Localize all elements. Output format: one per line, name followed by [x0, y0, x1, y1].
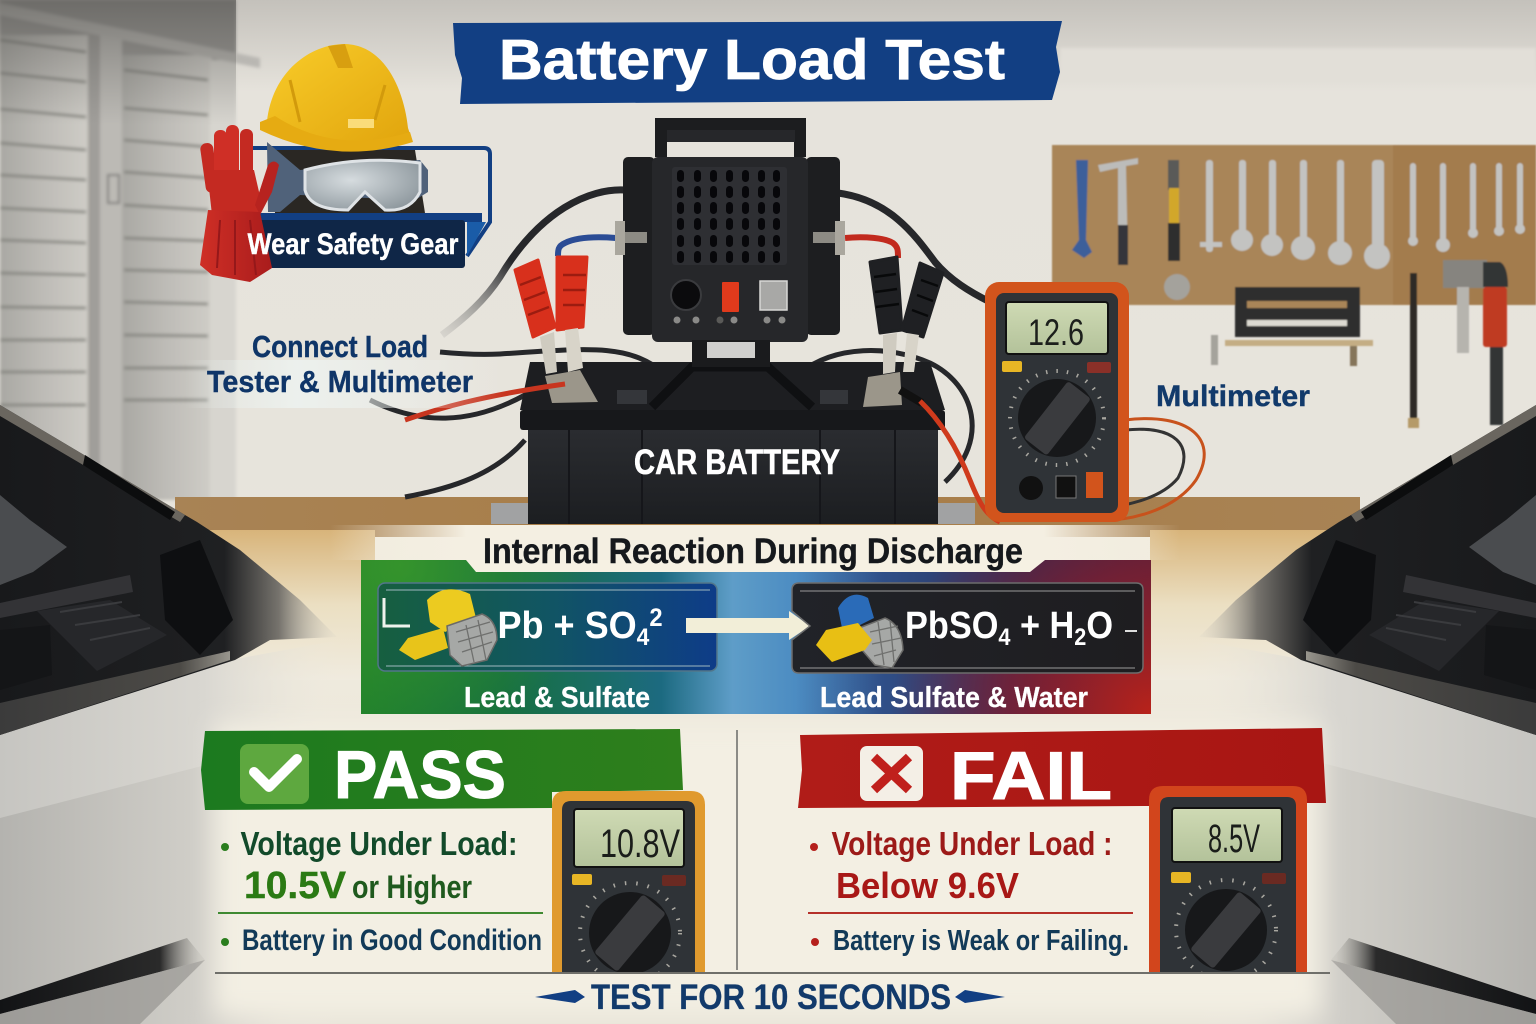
safety gear callout	[200, 44, 490, 282]
icon: hard hat	[260, 44, 413, 152]
baseline rule	[215, 972, 1330, 974]
label: lead sulfate and water: Lead Sulfate & Water	[820, 682, 1088, 714]
fail multimeter	[1149, 786, 1307, 980]
pass criterion: 10.5V	[244, 865, 347, 907]
tester grille	[672, 167, 787, 265]
safety gear label backing	[255, 220, 465, 268]
reaction heading	[330, 525, 1180, 572]
top multimeter	[985, 282, 1129, 522]
fail criterion	[810, 825, 1112, 906]
top multimeter: 12.6	[1028, 312, 1084, 353]
right clamps and leads	[813, 221, 1000, 522]
fail criterion: Voltage Under Load :	[832, 825, 1112, 862]
label: connect load tester and multimeter: Tester & Multimeter	[207, 364, 473, 399]
reaction heading: Internal Reaction During Discharge	[483, 532, 1023, 571]
title banner	[453, 21, 1062, 104]
lower floor background	[0, 530, 1536, 1024]
products box: PbSO	[905, 605, 1008, 647]
icon: lead and sulfate	[399, 589, 497, 666]
reactants box: Pb + SO	[498, 605, 644, 647]
pass criterion: or Higher	[352, 869, 472, 905]
cables behind tester	[370, 190, 1204, 520]
reactants box: 4	[637, 624, 650, 651]
reaction arrow	[686, 611, 810, 640]
fail banner: FAIL	[950, 738, 1112, 814]
icon: cross mark	[860, 746, 923, 801]
load tester	[623, 124, 840, 367]
soft light behind pass and fail panels	[215, 725, 1320, 1015]
title banner: Battery Load Test	[499, 28, 1005, 92]
icon: safety goggles	[267, 142, 428, 212]
divider	[736, 730, 738, 970]
pass multimeter: 10.8V	[600, 822, 680, 866]
pass result: Battery in Good Condition	[242, 924, 542, 957]
fail banner	[798, 728, 1326, 814]
icon: goggles wearer shadow	[270, 150, 425, 213]
products box: + H	[1010, 605, 1074, 647]
pass criterion: Voltage Under Load:	[240, 825, 518, 862]
left car with open hood	[0, 405, 340, 1024]
pass multimeter	[552, 791, 705, 983]
pass banner	[201, 729, 683, 813]
label: connect load tester and multimeter: Connect Load	[252, 329, 428, 364]
reactants box	[378, 583, 717, 671]
label: connect load tester and multimeter	[185, 329, 505, 408]
label: lead and sulfate: Lead & Sulfate	[464, 682, 650, 714]
reactants box: 2	[649, 604, 662, 632]
fail criterion: Below 9.6V	[836, 865, 1019, 906]
panel: internal reaction	[330, 525, 1180, 714]
products box: 2	[1074, 624, 1086, 651]
pass criterion	[221, 825, 518, 907]
pegboard with hanging tools	[1052, 145, 1536, 428]
panel: pass	[201, 729, 705, 983]
panel: fail	[798, 728, 1326, 980]
battery label: CAR BATTERY	[634, 443, 840, 482]
icon: check mark	[240, 744, 309, 804]
fail multimeter: 8.5V	[1208, 817, 1260, 861]
car battery	[491, 362, 975, 524]
label: multimeter: Multimeter	[1156, 380, 1310, 413]
left clamps and leads	[405, 221, 647, 420]
products box: O	[1086, 605, 1113, 647]
tester controls	[671, 280, 787, 324]
icon: lead sulfate and water	[816, 595, 903, 668]
products box	[792, 583, 1143, 673]
right car with open hood	[1196, 405, 1536, 1024]
test duration footer: TEST FOR 10 SECONDS	[591, 978, 951, 1017]
workbench	[175, 497, 1360, 537]
products box: 4	[998, 624, 1011, 651]
icon: red glove	[200, 125, 279, 282]
safety gear label: Wear Safety Gear	[248, 228, 459, 261]
pass banner: PASS	[334, 737, 506, 813]
fail result: Battery is Weak or Failing.	[833, 925, 1129, 957]
